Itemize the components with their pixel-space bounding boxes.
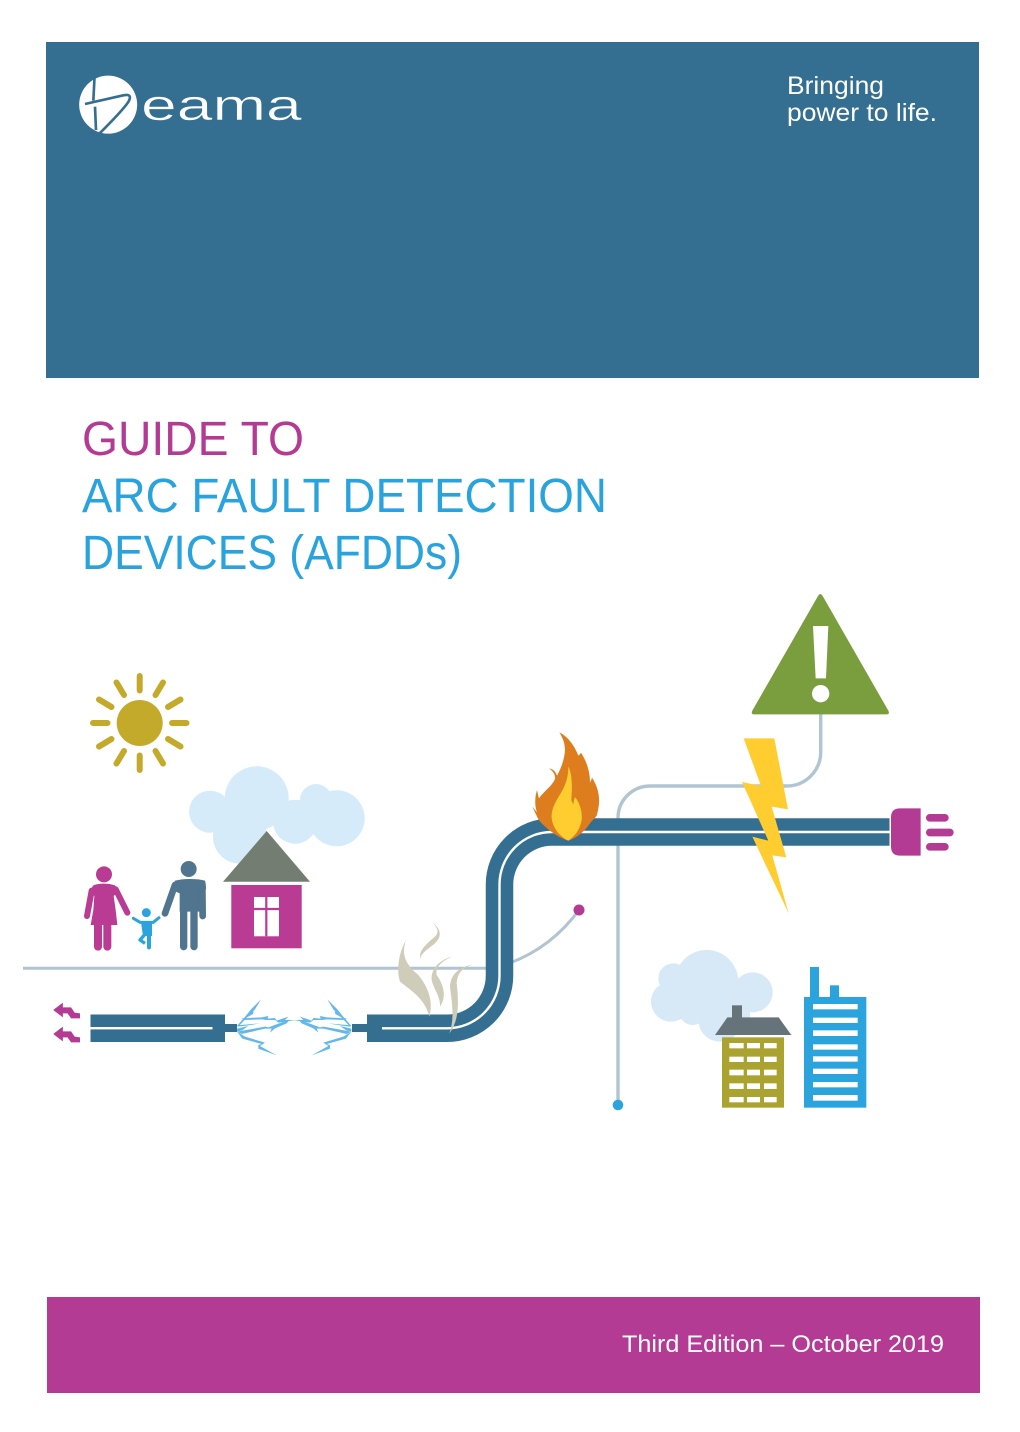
header panel: [46, 42, 979, 378]
icon: office tower: [804, 967, 866, 1108]
title: GUIDE TO: [82, 413, 304, 466]
icon: apartment building: [715, 1005, 791, 1108]
cable: broken left section: [90, 1014, 237, 1042]
icon: smoke: [398, 922, 473, 1033]
ground line: [23, 967, 490, 970]
icon: child: [133, 908, 159, 947]
icon: family: [87, 861, 206, 947]
icon: city with cloud: [651, 950, 866, 1108]
icon: exit arrows: [53, 1003, 80, 1042]
icon: house: [223, 831, 310, 948]
connector to purple dot: [510, 904, 584, 963]
connector from warning sign to blue dot: [613, 712, 821, 1110]
icon: cloud behind buildings: [651, 950, 773, 1042]
icon: lightning bolt: [742, 738, 789, 913]
icon: warning triangle: [752, 594, 889, 714]
title: [82, 413, 607, 580]
title: ARC FAULT DETECTION: [82, 470, 607, 523]
icon: cloud behind house: [189, 766, 365, 864]
icon: man: [165, 861, 206, 947]
logo: beama: [79, 75, 302, 134]
tagline: [787, 72, 937, 127]
icon: woman: [87, 866, 127, 947]
footer panel: [47, 1297, 980, 1393]
cable: main bent section: [352, 832, 890, 1028]
logo: beama: eama: [141, 80, 302, 130]
tagline: Bringing: [787, 72, 884, 100]
edition text: Third Edition – October 2019: [622, 1331, 944, 1358]
title: DEVICES (AFDDs): [82, 527, 462, 580]
icon: flame: [532, 732, 599, 841]
icon: arcing sparks: [237, 999, 351, 1055]
icon: sun: [93, 676, 186, 770]
tagline: power to life.: [787, 99, 937, 127]
icon: plug: [891, 808, 954, 856]
